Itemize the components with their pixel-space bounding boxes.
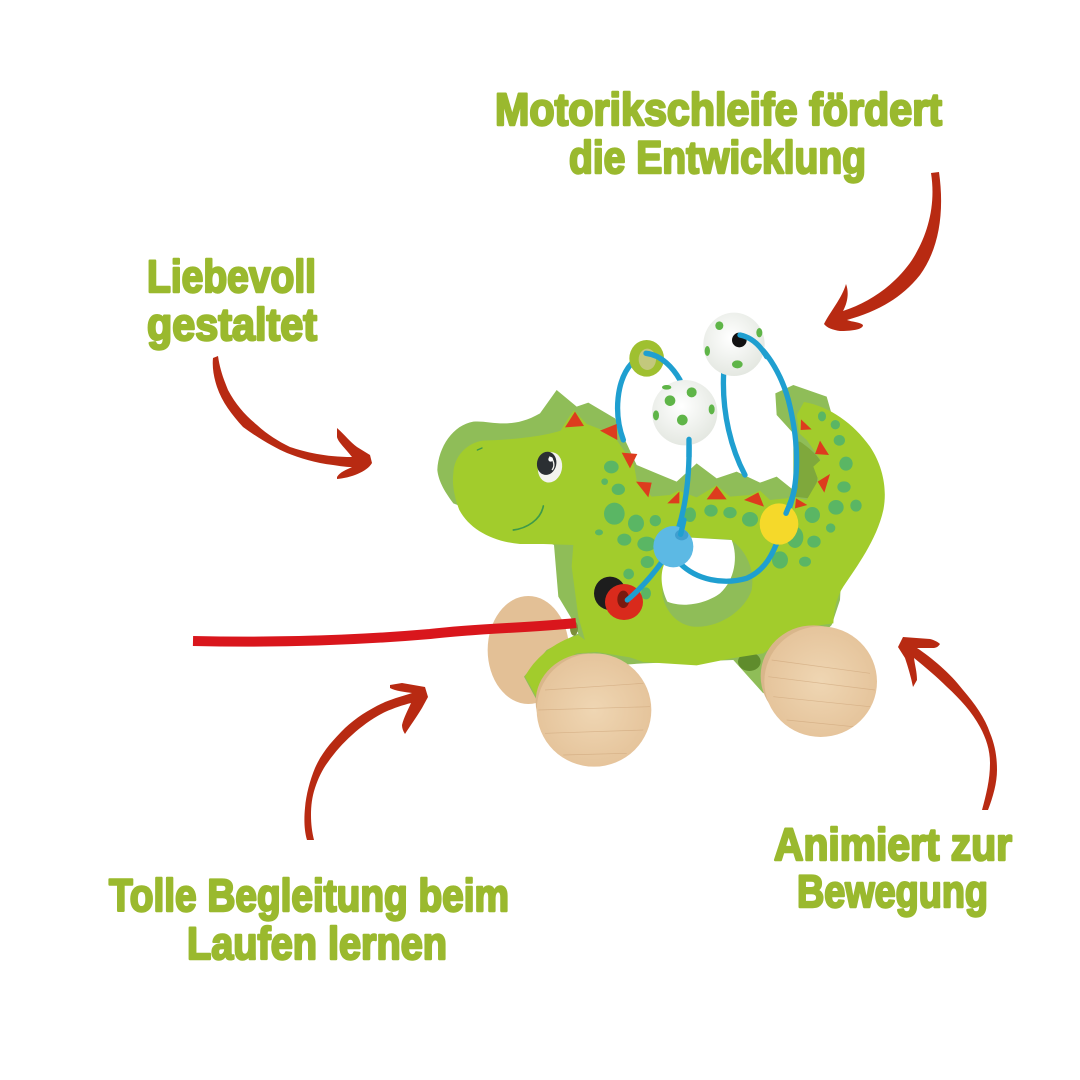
heading: Animiert zur Bewegung	[774, 819, 1012, 917]
arrow: to head	[213, 356, 372, 479]
heading: Animiert zur Bewegung: Bewegung	[797, 866, 988, 917]
body front	[453, 402, 885, 698]
arrow: to bead loop	[824, 172, 941, 331]
heading: Liebevoll gestaltet	[147, 251, 317, 350]
heading: Tolle Begleitung: Laufen lernen	[187, 918, 447, 969]
heading: Liebevoll gestaltet: gestaltet	[147, 299, 317, 350]
wheel axle shadow	[738, 652, 761, 671]
scales: red triangles	[565, 412, 830, 508]
illustration: wooden dinosaur toy	[437, 313, 885, 767]
smile and nostril	[477, 448, 543, 530]
arrow: to wheel	[898, 637, 997, 810]
body side edge	[437, 385, 847, 700]
hole	[662, 537, 752, 627]
blue bead	[653, 520, 693, 567]
white dotted ball, upper	[703, 313, 767, 376]
heading: Animiert zur Bewegung: Animiert zur	[774, 819, 1012, 870]
right wheel	[761, 625, 877, 737]
red bead	[605, 584, 643, 620]
dark ridge shading	[793, 442, 822, 498]
pull cord hole shadow	[570, 621, 578, 636]
rear wires	[618, 363, 745, 475]
eye	[535, 450, 565, 485]
heading: Motorikschleife: die Entwicklung	[569, 132, 866, 183]
yellow bead	[760, 487, 798, 545]
heading: Liebevoll gestaltet: Liebevoll	[147, 251, 316, 302]
scales: green dots	[595, 411, 862, 599]
heading: Tolle Begleitung: Tolle Begleitung beim	[109, 870, 509, 921]
white dotted ball, lower	[652, 380, 717, 457]
heading: Motorikschleife	[495, 84, 942, 183]
heading: Motorikschleife: Motorikschleife fördert	[495, 84, 942, 135]
black bead	[594, 577, 626, 610]
pull cord	[193, 623, 576, 642]
front wires	[627, 335, 797, 600]
front left wheel	[536, 653, 651, 767]
arrow: to pull cord	[304, 683, 428, 840]
heading: Tolle Begleitung	[109, 870, 509, 969]
rear left wheel	[488, 596, 569, 704]
green bead	[629, 340, 680, 380]
